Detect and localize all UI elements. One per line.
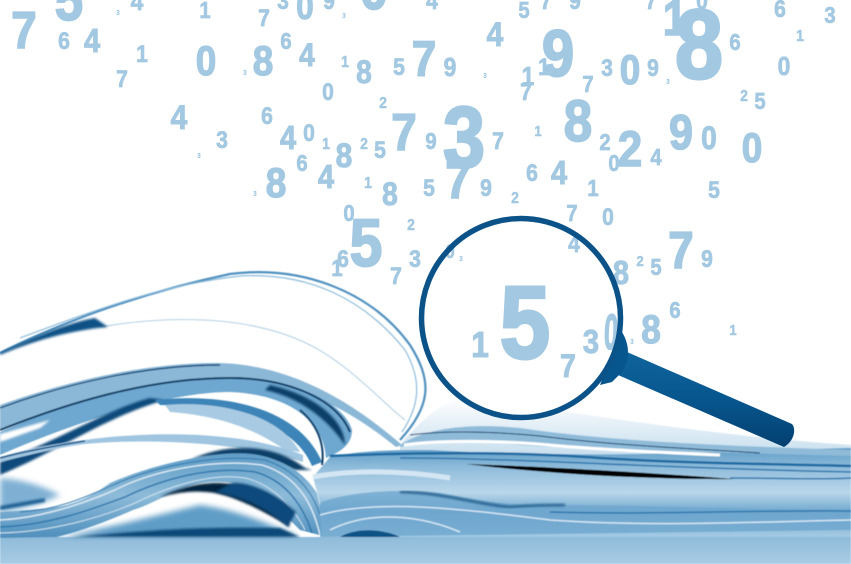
scattered numbers: 5 xyxy=(423,175,435,201)
lens digits: 0 xyxy=(445,241,455,262)
scattered numbers: 7 xyxy=(11,2,37,60)
scattered numbers: 7 xyxy=(520,79,532,105)
scattered numbers: 3 xyxy=(243,70,247,77)
scattered numbers: 4 xyxy=(551,154,568,191)
scattered numbers: 1 xyxy=(136,41,148,67)
scattered numbers: 7 xyxy=(390,263,402,289)
scattered numbers: 8 xyxy=(641,307,661,351)
scattered numbers: 4 xyxy=(280,119,297,156)
scattered numbers: 4 xyxy=(650,144,662,170)
scattered numbers: 3 xyxy=(666,79,670,86)
shadow above lower block xyxy=(190,448,312,470)
scattered numbers: 7 xyxy=(582,71,594,97)
dark streak under page xyxy=(0,318,108,355)
scattered numbers: 5 xyxy=(754,88,766,114)
scattered numbers: 7 xyxy=(492,128,504,154)
scattered numbers: 9 xyxy=(647,55,659,81)
lens digits: 1 xyxy=(471,325,489,365)
right top layers xyxy=(400,426,851,456)
scattered numbers: 6 xyxy=(296,150,308,176)
scattered numbers: 7 xyxy=(258,5,270,31)
black gap xyxy=(466,464,735,479)
scattered numbers: 6 xyxy=(58,28,70,54)
scattered numbers: 8 xyxy=(336,136,352,174)
scattered numbers: 0 xyxy=(303,120,315,146)
lens xyxy=(422,219,620,417)
scattered numbers: 7 xyxy=(668,222,694,280)
scattered numbers: 0 xyxy=(701,121,717,156)
scattered numbers: 1 xyxy=(522,63,534,91)
lens rim xyxy=(422,218,620,418)
scattered numbers: 4 xyxy=(171,98,188,136)
scattered numbers: 1 xyxy=(322,135,330,153)
right block of pages xyxy=(313,448,851,537)
scattered numbers: 8 xyxy=(564,89,592,154)
scattered numbers: 1 xyxy=(796,27,804,45)
scattered numbers: 3 xyxy=(197,153,201,160)
lens digits: 5 xyxy=(500,265,550,380)
scattered numbers: 5 xyxy=(393,54,405,80)
scattered numbers: 0 xyxy=(608,150,620,176)
scattered numbers: 2 xyxy=(407,216,415,234)
lens digits: 7 xyxy=(560,349,576,384)
scattered numbers: 1 xyxy=(364,174,372,192)
scattered numbers: 9 xyxy=(542,18,574,91)
scattered numbers: 4 xyxy=(299,38,315,73)
scattered numbers: 7 xyxy=(566,200,578,226)
scattered numbers: 1 xyxy=(331,255,343,281)
scattered numbers: 0 xyxy=(742,125,762,172)
scattered numbers: 1 xyxy=(729,321,737,338)
lower right pages xyxy=(313,472,450,478)
scattered numbers: 7 xyxy=(412,30,436,87)
scattered numbers: 4 xyxy=(84,22,101,59)
scattered numbers: 2 xyxy=(511,189,519,207)
scattered numbers: 4 xyxy=(487,15,504,53)
scattered numbers: 9 xyxy=(701,246,713,272)
scattered numbers: 3 xyxy=(116,10,120,17)
left fading page xyxy=(0,478,60,512)
scattered numbers: 8 xyxy=(266,160,286,207)
neck xyxy=(600,332,628,385)
lens digits: 3 xyxy=(459,256,463,263)
lens digits: 4 xyxy=(568,231,580,257)
scattered numbers: 5 xyxy=(708,177,720,203)
scattered numbers: 1 xyxy=(534,122,542,139)
scattered numbers: 3 xyxy=(601,55,613,81)
scattered numbers: 3 xyxy=(253,191,257,198)
scattered numbers: 3 xyxy=(443,91,485,186)
black arch shadow xyxy=(160,483,290,527)
scattered numbers: 3 xyxy=(216,127,228,153)
scattered numbers: 5 xyxy=(350,207,382,281)
scattered numbers: 8 xyxy=(382,177,398,212)
scattered numbers: 7 xyxy=(445,152,471,210)
magnifying glass xyxy=(422,218,794,447)
scattered numbers: 3 xyxy=(483,73,487,80)
handle xyxy=(618,352,794,447)
scattered numbers: 9 xyxy=(669,104,693,160)
scattered numbers: 9 xyxy=(425,128,437,154)
lens digits: 8 xyxy=(613,254,629,291)
scattered numbers: 0 xyxy=(343,200,355,226)
scattered numbers: 0 xyxy=(778,53,790,81)
scattered numbers: 5 xyxy=(374,137,386,163)
open magazines xyxy=(0,272,851,564)
right page fade xyxy=(400,397,851,470)
scattered numbers: 3 xyxy=(409,246,421,272)
scattered numbers: 9 xyxy=(480,175,492,201)
scattered numbers: 1 xyxy=(538,54,550,80)
scattered numbers: 6 xyxy=(526,160,538,186)
scattered numbers: 8 xyxy=(356,55,372,90)
scattered numbers: 2 xyxy=(618,120,642,177)
scattered numbers: 2 xyxy=(360,135,368,153)
scattered numbers: 8 xyxy=(253,38,273,85)
scattered numbers: 6 xyxy=(280,28,292,54)
scattered numbers: 0 xyxy=(196,38,216,85)
middle stack xyxy=(0,363,402,447)
scattered numbers: 2 xyxy=(636,252,644,269)
scattered numbers: 4 xyxy=(318,158,335,195)
scattered numbers: 0 xyxy=(620,47,640,94)
scattered numbers: 5 xyxy=(650,254,662,280)
scattered numbers: 0 xyxy=(602,204,614,230)
scattered numbers: 7 xyxy=(391,104,417,162)
scattered numbers: 3 xyxy=(630,339,634,346)
scattered numbers: 6 xyxy=(729,29,741,55)
lens digits: 0 xyxy=(603,305,619,360)
floor shadow xyxy=(60,505,300,537)
scattered numbers: 9 xyxy=(444,54,456,82)
scattered numbers: 6 xyxy=(669,297,681,323)
floating page xyxy=(0,272,425,440)
scattered numbers: 2 xyxy=(379,94,387,112)
scattered numbers: 7 xyxy=(116,66,128,92)
lens digits: 3 xyxy=(583,323,599,360)
scattered numbers: 6 xyxy=(261,103,273,129)
scattered numbers: 3 xyxy=(342,13,346,20)
scattered numbers: 1 xyxy=(587,175,599,201)
lower block of pages xyxy=(0,453,327,538)
scattered numbers: 2 xyxy=(599,129,611,155)
lens digits xyxy=(445,231,629,384)
scattered numbers: 1 xyxy=(341,53,349,71)
scattered numbers xyxy=(11,0,836,351)
scattered numbers: 3 xyxy=(824,2,836,28)
scattered numbers: 2 xyxy=(740,87,748,105)
scattered numbers: 6 xyxy=(337,246,349,272)
table surface xyxy=(0,537,851,564)
scattered numbers: 0 xyxy=(322,79,334,105)
